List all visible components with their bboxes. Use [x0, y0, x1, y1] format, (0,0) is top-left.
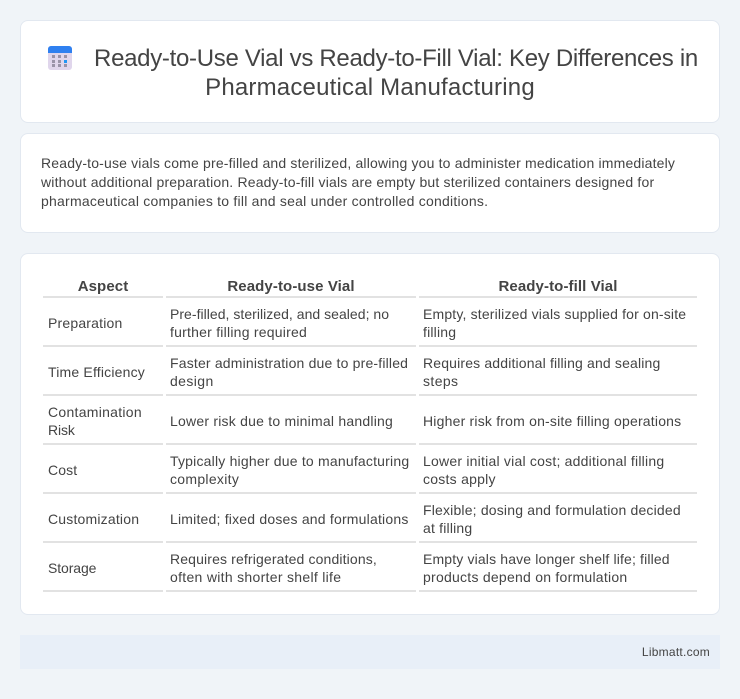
row: Storage: often with shorter shelf life [170, 569, 341, 585]
icon: calendar [48, 46, 72, 70]
row: Storage: Empty vials have longer shelf life; filled [423, 551, 670, 567]
row: Storage: products depend on formulation [423, 569, 627, 585]
row: Cost: Cost [48, 462, 77, 478]
row: Preparation: filling [423, 324, 456, 340]
panel: title card [20, 20, 720, 123]
comparison table [43, 278, 697, 592]
text block: intro paragraph [41, 155, 675, 209]
row: Customization: Customization [48, 511, 139, 527]
title [94, 45, 698, 101]
row: Preparation: further filling required [170, 324, 307, 340]
row: Cost: complexity [170, 471, 239, 487]
panel: comparison table [20, 253, 720, 615]
row: Time Efficiency: Requires additional filling and sealing [423, 355, 660, 371]
row: Contamination Risk [43, 404, 697, 445]
row: Contamination Risk: Higher risk from on-site filling operations [423, 413, 681, 429]
row: Customization [43, 502, 697, 543]
title: Pharmaceutical Manufacturing [205, 74, 535, 101]
row: Preparation: Pre-filled, sterilized, and sealed; no [170, 306, 389, 322]
row: Cost: Lower initial vial cost; additional filling [423, 453, 664, 469]
row: Customization: Flexible; dosing and formulation decided [423, 502, 681, 518]
row: Storage [43, 551, 697, 592]
row: Cost [43, 453, 697, 494]
footer: source: Libmatt.com [642, 645, 710, 659]
row: Time Efficiency: steps [423, 373, 458, 389]
row: Time Efficiency [43, 355, 697, 396]
text block: intro paragraph: without additional preparation. Ready-to-fill vials are empty but sterilized containers designed for [41, 174, 654, 190]
row: Preparation: Preparation [48, 315, 122, 331]
table header: Ready-to-use Vial [227, 278, 355, 295]
row: Contamination Risk: Risk [48, 422, 75, 438]
row: Cost: costs apply [423, 471, 496, 487]
text block: intro paragraph: Ready-to-use vials come pre-filled and sterilized, allowing you to administer medication immediately [41, 155, 675, 171]
row: Time Efficiency: Time Efficiency [48, 364, 145, 380]
table header [43, 278, 697, 298]
row: Preparation: Empty, sterilized vials supplied for on-site [423, 306, 686, 322]
row: Customization: Limited; fixed doses and formulations [170, 511, 409, 527]
row: Cost: Typically higher due to manufacturing [170, 453, 409, 469]
row: Contamination Risk: Contamination [48, 404, 142, 420]
row: Contamination Risk: Lower risk due to minimal handling [170, 413, 393, 429]
title: Ready-to-Use Vial vs Ready-to-Fill Vial: Key Differences in [94, 45, 698, 72]
text block: intro paragraph: pharmaceutical companies to fill and seal under controlled conditions. [41, 193, 488, 209]
footer bar [20, 635, 720, 669]
row: Time Efficiency: design [170, 373, 214, 389]
row: Storage: Requires refrigerated conditions, [170, 551, 377, 567]
row: Storage: Storage [48, 560, 96, 576]
table header: Aspect [78, 278, 128, 295]
table header: Ready-to-fill Vial [498, 278, 618, 295]
row: Time Efficiency: Faster administration due to pre-filled [170, 355, 408, 371]
row: Preparation [43, 306, 697, 347]
row: Customization: at filling [423, 520, 472, 536]
panel: intro [20, 133, 720, 233]
